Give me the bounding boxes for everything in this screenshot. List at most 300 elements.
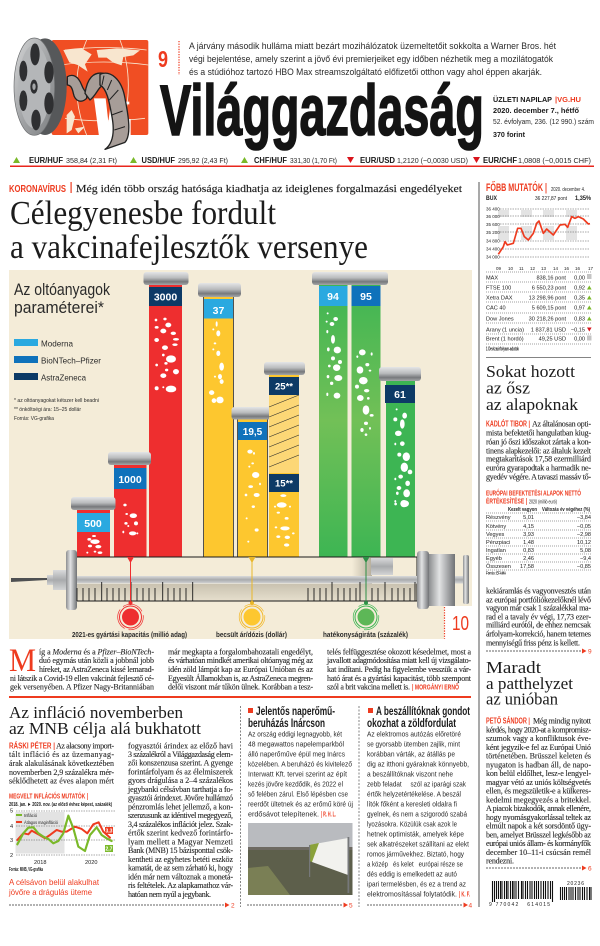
- vial: AstraZeneca price 15-25: [264, 362, 305, 557]
- BUX line chart: 16: [575, 266, 581, 271]
- table title: [486, 488, 581, 506]
- exchange rate ticker: EUR/HUF: [29, 156, 63, 165]
- indicators table: Dow Jones: [486, 316, 514, 322]
- story: green transition suppliers: [367, 706, 472, 910]
- continuation arrow: page 9: 9: [588, 648, 592, 656]
- photo: billboard on field: [248, 823, 352, 895]
- solar headline: beruházás Inárcson: [248, 718, 325, 730]
- chart subtitle: 2018. jan. ► 2020. nov. (az előző évhez képest, százalék): [9, 802, 112, 808]
- vial: Moderna price 37: 37: [213, 305, 224, 317]
- dotted teaser divider: [178, 41, 180, 75]
- axis labels: 2021-es gyártási kapacitás (millió adag): [72, 632, 187, 639]
- solar text: | R. H. L.: [321, 812, 336, 818]
- vial: Moderna price 37: [198, 283, 241, 557]
- story: EU stalemate text: nyugaton is hadban áll, de napo-: [486, 760, 591, 769]
- vial: AstraZeneca price 15-25: 15**: [275, 478, 293, 490]
- vial: Moderna efficacy 94: 94: [327, 291, 339, 303]
- table: European funds net sales: −9,4: [580, 556, 591, 562]
- barcode: issue add-on: 20236: [567, 881, 584, 887]
- table: European funds net sales: 0,83: [523, 548, 534, 554]
- story: funds headline: az alapoknak: [486, 395, 579, 414]
- exchange rate ticker: 295,92 (2,43 Ft): [178, 156, 228, 165]
- indicators table: 13 298,96 pont: [529, 296, 566, 302]
- lead article text: szól a brit vakcina mellett is.: [327, 682, 410, 692]
- pointer: efficacy marker (green): [353, 557, 379, 630]
- BUX line chart: 09: [496, 266, 502, 271]
- vial: Moderna capacity 3000: 3000: [154, 292, 177, 304]
- story: EU stalemate text: december 10–11-i csúcsán remél: [486, 848, 592, 857]
- chart source: Forrás: MNB, VG-grafika: [9, 867, 43, 873]
- indicators table: 0,35: [574, 296, 585, 302]
- suppliers text: [367, 730, 470, 898]
- vial: AstraZeneca price 15-25: 25**: [275, 382, 293, 392]
- story: inflation text column 2: pénzromlás lehet jellemző, a kon-: [128, 802, 233, 812]
- legend: BioNTech–Pfizer: [41, 356, 101, 366]
- story: funds intro text: megtakarítások 17,58 ezermilliárd: [486, 454, 591, 464]
- chart subhead: A célsávon belül alakulhat: [9, 877, 100, 887]
- story: inflation text column 1: RÁSKI PÉTER |: [9, 742, 55, 750]
- story: funds intro text: tinens alapkezelői: az általuk kezelt: [486, 446, 592, 456]
- BUX line chart: 16: [564, 266, 570, 271]
- story: inflation text column 2: [127, 742, 234, 899]
- story: EU stalemate headline: Maradt: [486, 658, 541, 677]
- table source: Forrás: EFAMA: [486, 570, 506, 576]
- vial: BioNTech-Pfizer efficacy 95: [345, 272, 388, 557]
- lead article text: duó egymás után közli a jobbnál jobb: [39, 656, 154, 665]
- indicators table: 1 837,81 USD: [531, 328, 566, 334]
- teaser text: A járvány második hulláma miatt bezárt mozihálózatok üzemeltetőit sokkolta a Warner Bros. hét: [189, 41, 556, 52]
- lead article text: ható árat és a gyártási kapacitást, több szempont: [327, 674, 472, 683]
- story: inflation text column 1: séklődhetett az éves alapon mért: [9, 776, 115, 786]
- issue information: |VG.HU: [555, 95, 581, 104]
- indicators heading: FŐBB MUTATÓK |: [486, 181, 547, 194]
- BUX line chart: 17: [588, 266, 594, 271]
- suppliers text: hetnek optimisták, amelyek képe: [367, 830, 464, 838]
- solar headline: Jelentős naperőmű-: [256, 706, 335, 718]
- issue information: 370 forint: [493, 130, 525, 139]
- story: funds headline: az ősz: [486, 378, 530, 398]
- exchange rate ticker: 358,84 (2,31 Ft): [66, 156, 117, 165]
- table: European funds net sales: 5,01: [523, 515, 534, 521]
- story: EU stalemate text: magyar vétó az uniós költségvetés: [486, 778, 591, 787]
- suppliers text: ipari termelésben, és ez a trend az: [367, 880, 466, 888]
- exchange rate ticker: USD/HUF: [142, 156, 175, 165]
- BUX line chart: 34 400: [486, 246, 500, 252]
- indicators table: 6 550,23 pont: [532, 286, 566, 292]
- table: European funds net sales: 10,12: [577, 540, 591, 546]
- lead story kicker: Még idén több ország hatósága kiadhatja az ideiglenes forgalmazási engedélyeket: [76, 183, 462, 195]
- story: EU stalemate text: [486, 716, 592, 866]
- BUX summary: 1,35%: [575, 195, 591, 202]
- story: EU stalemate text: kon belül eldőlhet, lesz-e lengyel-: [486, 769, 591, 778]
- table: European funds net sales: Ingatlan: [486, 548, 506, 554]
- story: EU stalemate text: rendezni.: [486, 857, 514, 866]
- story: inflation text column 2: idén már nem változnak a monetá-: [128, 872, 233, 882]
- lead story headline: Célegyenesbe fordult: [10, 195, 276, 232]
- solar text: Az ország eddigi legnagyobb, két: [248, 730, 342, 738]
- page reference 10: 10: [452, 613, 469, 635]
- story: inflation headline: [9, 703, 201, 738]
- indicators table: −0,15: [571, 328, 585, 334]
- story: funds continued text: az európai portfóliókezelőknél lévő: [486, 596, 591, 604]
- suppliers text: se gyorsabb ütemben zajlik, mint: [367, 740, 460, 748]
- indicators table: CAC 40: [486, 306, 506, 312]
- story: funds intro text: Az általánosan opti-: [532, 420, 591, 428]
- lead article text: [9, 643, 472, 692]
- lead article text: és várhatóan mindkét amerikai oltóanyag még az: [168, 656, 313, 665]
- story: EU stalemate text: történetében. Brüsszel keleten és: [486, 752, 591, 761]
- story: EU stalemate headline: [486, 658, 573, 708]
- indicators table: 0,00: [574, 276, 585, 282]
- drop cap: M: [9, 643, 36, 679]
- vial: BioNTech-Pfizer capacity 1000: [108, 452, 151, 557]
- story: EU stalemate text: kedelmi megegyezés a britekkel.: [486, 795, 591, 804]
- column divider dashed: [358, 706, 360, 907]
- story: inflation text column 1: novemberben 2,9 százalékra mér-: [9, 768, 114, 777]
- page reference 10: [444, 607, 469, 639]
- story: EU stalemate text: A piacok bizakodók, annak ellenére,: [486, 804, 591, 813]
- chart: inflation indicators: 2018: [34, 860, 46, 866]
- axis labels: hatékonyságiráta (százalék): [323, 632, 408, 639]
- exchange rate ticker: 1,2120 (−0,0030 USD): [397, 156, 468, 165]
- legend: [14, 338, 101, 382]
- table: European funds net sales: 17,58: [520, 564, 534, 570]
- suppliers text: sek alkatrészeket szállítani az elekt: [367, 840, 469, 848]
- BUX line chart: 34 000: [486, 254, 500, 260]
- table title: ÉRTÉKESÍTÉSE |: [486, 496, 527, 506]
- chart: inflation indicators: 5: [10, 808, 13, 814]
- barcode: main: [489, 881, 552, 908]
- BUX summary: [486, 195, 591, 202]
- story: funds continued text: kekiáramlás és vagyonvesztés után: [486, 586, 591, 596]
- indicators table: 0,97: [574, 306, 585, 312]
- axis labels: [72, 632, 408, 639]
- story: inflation text column 2: gyors drágulása a 2–4 százalékos: [128, 776, 233, 785]
- lead story headline: a vakcinafejlesztők versenye: [10, 229, 368, 266]
- story: inflation text column 2: forintárfolyam és az élelmiszerek: [128, 768, 233, 776]
- indicators table: 30 218,26 pont: [529, 316, 566, 322]
- vial: BioNTech-Pfizer price 19.5: 19,5: [243, 427, 263, 438]
- indicators table: Brent (1 hordó): [486, 336, 524, 342]
- indicators table: FTSE 100: [486, 286, 511, 292]
- vial: BioNTech-Pfizer capacity 1000: 1000: [118, 474, 142, 486]
- story: inflation text column 2: jegybanki célsávban tarthatja a fo-: [127, 785, 233, 794]
- chart legend: Átlagos maginfláció: [24, 819, 58, 825]
- chart subhead: jövőre a drágulás üteme: [8, 887, 92, 897]
- lead article text: delői viszont már tűkön ülnek. Korábban a tesz-: [168, 682, 313, 692]
- indicators table: 49,25 USD: [539, 336, 566, 342]
- story: EU stalemate text: európai uniós állam- és kormányfők: [486, 839, 591, 848]
- story: inflation text column 1: tált infláció és az üzemanyag-: [9, 750, 114, 759]
- lead article text: kat indítani. Pedig ha figyelembe vesszük a vár-: [327, 665, 471, 674]
- solar headline: [248, 706, 335, 730]
- story: EU stalemate text: kérdés, hogy 2020-at a kompromisz-: [486, 725, 591, 734]
- table: European funds net sales: Összesen: [486, 563, 511, 570]
- table: European funds net sales: Vegyes: [486, 532, 505, 538]
- story: funds continued text: milliárd eurótól, de ehhez nemcsak: [486, 620, 591, 630]
- vial: BioNTech-Pfizer price 19.5: [232, 407, 274, 557]
- story: EU stalemate text: ellen, és megszületik-e a külkeres-: [486, 787, 591, 796]
- BUX line chart: 36 400: [486, 206, 500, 212]
- teaser text: és a stúdióhoz tartozó HBO Max streamszolgáltató előfizetői otthon vagy ahol éppen akarják.: [189, 67, 542, 78]
- BUX summary: 36 227,87 pont: [535, 196, 567, 202]
- solar text: kezés jövőre kezdődik, és 2022 el: [248, 780, 343, 788]
- table: European funds net sales: 1,48: [523, 540, 534, 546]
- vial: AstraZeneca efficacy 61: [379, 367, 421, 557]
- pointer: price marker (yellow): [239, 557, 265, 630]
- lead article text: ni látszik a Covid-19 ellen vakcinát fejlesztő cé-: [10, 674, 154, 683]
- lead story headline: [10, 195, 368, 266]
- table: European funds net sales: [486, 488, 591, 576]
- table: European funds net sales: Kötvény: [486, 524, 506, 530]
- solar text: reerdőt ültetnek és az erőmű köré új: [248, 800, 353, 808]
- indicators table: 5 609,15 pont: [532, 306, 566, 312]
- value tag: inflation: 2,7: [106, 846, 113, 852]
- BUX line chart: 12: [530, 266, 536, 271]
- table: European funds net sales: Kezelt vagyon: [508, 507, 537, 513]
- story: inflation text column 2: Bank (MNB) 15 bázisponttal csök-: [128, 846, 233, 855]
- vial: Moderna capacity 500: [71, 497, 116, 557]
- continuation arrow: page 5: 5: [349, 902, 353, 910]
- continuation arrow: page 4: 4: [468, 902, 472, 910]
- BUX line chart: 35 200: [486, 230, 500, 235]
- infographic panel: vaccine parameters: [9, 270, 472, 639]
- indicators table: Xetra DAX: [486, 296, 513, 302]
- exchange rate ticker: CHF/HUF: [254, 156, 287, 165]
- table: European funds net sales: −0,05: [577, 524, 591, 530]
- suppliers headline: A beszállítóknak gondot: [376, 706, 470, 718]
- vial: Moderna efficacy 94: [312, 272, 354, 557]
- BUX line chart: 13: [541, 266, 547, 271]
- story: EU stalemate text: szumok vagy a konfliktusok éve-: [486, 734, 591, 743]
- story: inflation text column 1: árak alakulásának következtében: [9, 759, 114, 768]
- story: funds continued text: vagyon már csak 1 százalékkal ma-: [486, 604, 591, 612]
- BUX summary: BUX: [486, 196, 497, 202]
- indicators table: Arany (1 uncia): [486, 328, 524, 334]
- table: European funds net sales: Részvény: [486, 515, 511, 521]
- graphic title: [14, 281, 111, 317]
- suppliers text: romos járművekhez. Biztató, hogy: [367, 850, 464, 858]
- masthead logo: film reel on orange world map: [14, 38, 148, 149]
- story: inflation text column 1: Az alacsony import-: [56, 742, 114, 750]
- continuation arrow: page 2: [9, 902, 235, 910]
- legend: AstraZeneca: [41, 372, 86, 382]
- continuation arrow: page 5: [247, 902, 353, 910]
- BUX line chart: 35 600: [486, 222, 500, 227]
- exchange rate ticker: 1,0808 (−0,0015 CHF): [518, 156, 591, 165]
- indicators table: 0,83: [574, 316, 585, 322]
- lead article text: javallott adagmódosítása miatt kell új vizsgálato-: [326, 656, 471, 665]
- suppliers text: dés eddig is emelkedett az autó: [367, 870, 457, 878]
- story: inflation text column 2: ris feltételek. Az alapkamathoz vár-: [128, 881, 233, 890]
- story: inflation text column 2: kamatát, de az sem zárható ki, hogy: [128, 864, 233, 873]
- table: European funds net sales: Egyéb: [486, 556, 502, 562]
- vial: Moderna capacity 500: 500: [84, 518, 102, 530]
- graphic notes: ** önköltségi ára: 15–25 dollár: [14, 407, 81, 413]
- BUX line chart: 10: [508, 266, 514, 271]
- syringe: [11, 550, 469, 610]
- continuation arrow: page 2: 2: [231, 902, 235, 910]
- story: inflation text column 2: zői konszenzusa szerint. A gyenge: [128, 759, 233, 768]
- solar text: Interwatt Kft. tervei szerint az épít: [248, 770, 347, 778]
- story: EU stalemate text: elmúlt napok a két sorsdöntő ügy-: [486, 822, 591, 831]
- story: inflation headline: az MNB célja alá bukhatott: [9, 719, 201, 738]
- table: European funds net sales: Pénzpiaci: [486, 540, 510, 546]
- axis labels: becsült ár/dózis (dollár): [216, 632, 287, 639]
- BUX line chart: 14: [553, 266, 559, 271]
- suppliers text: zebb feladat szól az iparági szak: [367, 780, 466, 788]
- suppliers text: korábban várták, az átállás pe: [367, 750, 455, 758]
- story: funds continued text: rad el a tavaly év végi, 17,73 ezer-: [486, 612, 591, 622]
- story: funds intro text: KADLÓT TIBOR |: [486, 420, 530, 428]
- exchange rate ticker: EUR/CHF: [483, 156, 517, 165]
- table: European funds net sales: −3,84: [577, 515, 591, 521]
- story: funds continued text: mennyiségű friss pénz is kellett.: [486, 638, 580, 648]
- pointer: capacity marker (red): [118, 557, 143, 630]
- value tag: core inflation: 3,3: [106, 828, 113, 834]
- suppliers text: | K. F.: [459, 892, 470, 898]
- table: European funds net sales: −0,85: [577, 564, 591, 570]
- indicators table: 0,92: [574, 286, 585, 292]
- suppliers text: gyelnek, és nem a szigorodó szabá: [367, 810, 468, 818]
- story: inflation text column 2: 3 százalékról a Világgazdaság elem-: [128, 750, 233, 759]
- issue information: 2020. december 7., hétfő: [493, 106, 579, 115]
- story: EU stalemate text: ben, amelyet Brüsszel legkésőbb az: [486, 830, 591, 839]
- graphic notes: Forrás: VG-grafika: [14, 416, 55, 422]
- suppliers text: a beszállítóknak viszont nehe: [367, 770, 453, 778]
- suppliers text: elektromosítással folytatódik.: [367, 890, 457, 898]
- BUX line chart: 11: [519, 266, 524, 271]
- lead article text: Egyesült Államokban is, az AstraZeneca megren-: [168, 673, 313, 683]
- issue information: [493, 95, 594, 139]
- BUX line chart: 36 000: [486, 214, 500, 219]
- suppliers text: értők helyzetértékelése. A beszál: [367, 790, 461, 798]
- lead article text: | MORGÁNYI ERNŐ: [412, 682, 459, 692]
- indicators table: MAX: [486, 276, 498, 282]
- indicators footnote: 1 Devizaárfolyam-adatok: [486, 346, 519, 352]
- table: European funds net sales: 2,46: [523, 556, 534, 562]
- graphic notes: [14, 398, 99, 422]
- story: EU stalemate text: hogy nyomásgyakorlással teltek az: [486, 813, 591, 822]
- continuation arrow: page 6: [486, 866, 592, 872]
- suppliers text: a közép és kelet európai része se: [367, 860, 463, 868]
- story: funds headline: [486, 362, 579, 414]
- story: funds intro text: mista befektetői hangulatban kiug-: [486, 428, 591, 438]
- section rule: [9, 696, 471, 698]
- column divider dashed: [240, 706, 242, 907]
- story: funds continued text: árfolyam-korrekció, hanem tetemes: [486, 630, 591, 638]
- lead article text: telés felfüggesztése okozott késedelmet, most a: [327, 648, 471, 656]
- solar text: álló naperőműve épül meg Inárcs: [248, 750, 345, 758]
- indicators heading: 2020. december 4.: [551, 187, 585, 193]
- continuation arrow: page 4: [367, 902, 472, 910]
- sidebar rule: [486, 356, 591, 359]
- lead article text: gek versenyében. A Pfizer Nagy-Britanniában: [10, 682, 154, 692]
- table: European funds net sales: 4,15: [523, 524, 534, 530]
- story: inflation text column 2: kentheti az egyhetes betéti eszköz: [128, 855, 233, 864]
- chart subhead: [8, 877, 100, 897]
- page number 9: 9: [158, 46, 168, 72]
- story: inflation text column 2: fogyasztói árindex az előző havi: [128, 742, 234, 750]
- story: inflation text column 2: szenzusunk az idéntivel megegyező,: [128, 811, 233, 820]
- story: funds continued text: [486, 586, 591, 648]
- story: funds headline: Sokat hozott: [486, 362, 575, 381]
- logo letters: [94, 98, 131, 136]
- table title: 2020 (millió euró): [529, 500, 557, 506]
- exchange rate ticker: 331,30 (1,70 Ft): [290, 156, 337, 165]
- table: European funds net sales: 5,08: [580, 548, 591, 554]
- graphic title: paraméterei*: [14, 299, 105, 317]
- indicators table: 838,16 pont: [536, 276, 566, 282]
- lead article text: idén zöld lámpát kap az Európai Unióban és az: [168, 665, 313, 674]
- barcode: main: 9 770042 614015: [489, 902, 550, 908]
- table: European funds net sales: 3,93: [523, 532, 534, 538]
- suppliers text: lítók főként a keresleti oldalra fi: [367, 800, 457, 808]
- suppliers text: Az elektromos autózás előretöré: [367, 730, 461, 738]
- graphic title: Az oltóanyagok: [14, 281, 111, 299]
- story: EU stalemate headline: az unióban: [486, 690, 558, 708]
- BUX line chart: [486, 206, 594, 271]
- vial: Moderna capacity 3000: [144, 272, 188, 557]
- lead article text: íg a Moderna és a Pfizer–BioNTech-: [39, 648, 154, 656]
- graphic notes: * az oltóanyagokat kétszer kell beadni: [14, 398, 99, 404]
- lead article text: már megkapta a forgalombahozatali engedélyt,: [168, 648, 313, 656]
- story: inflation text column 2: gyasztói árindexet. Jövőre hullámzó: [128, 794, 233, 803]
- teaser text: végi bejelentése, amely szerint a jövő évi premierjeiket egy időben nézhetik meg a mozilátogatók: [189, 54, 553, 65]
- chart: inflation indicators: 3: [10, 838, 13, 844]
- story: funds intro text: euróra gyarapodtak a harmadik ne-: [486, 464, 591, 472]
- continuation arrow: page 9: [486, 648, 592, 656]
- chart title: MEGVELT INFLÁCIÓS MUTATÓK |: [9, 792, 88, 800]
- solar text: 48 megawattos napelemparkból: [248, 740, 344, 748]
- vial: BioNTech-Pfizer efficacy 95: 95: [360, 291, 372, 303]
- story: inflation text column 2: értők szerint kedvező forintárfo-: [128, 829, 233, 838]
- story: inflation text column 2: hatóan nem nyúl a jegybank.: [128, 890, 211, 899]
- BUX line chart: 34 800: [486, 238, 500, 244]
- chart: inflation indicators: [9, 792, 115, 873]
- story: EU stalemate text: Még mindig nyitott: [533, 716, 592, 726]
- suppliers headline: okozhat a zöldfordulat: [367, 718, 456, 730]
- story: inflation headline: Az infláció novemberben: [9, 703, 184, 722]
- story: funds intro text: gyedév végére. A tavaszi massáv tő-: [486, 472, 591, 482]
- vial: AstraZeneca efficacy 61: 61: [394, 389, 406, 401]
- suppliers text: lyozásokra. Közülük csak azok le: [367, 820, 457, 828]
- exchange rate ticker: [13, 156, 591, 165]
- chart: inflation indicators: 2: [10, 853, 13, 859]
- story: EU stalemate text: PETŐ SÁNDOR |: [486, 716, 530, 726]
- chart legend: [16, 813, 58, 825]
- barcode: issue add-on: [560, 881, 591, 900]
- masthead rule: [10, 166, 594, 167]
- continuation arrow: page 6: 6: [588, 866, 592, 872]
- exchange rate ticker: EUR/USD: [360, 156, 395, 165]
- solar text: [248, 730, 353, 818]
- panel: key indicators: [486, 181, 594, 352]
- story: funds intro text: róan jó őszi időszakot zártak a kon-: [486, 438, 591, 446]
- suppliers text: dig az itthoni gyáraknak könnyebb,: [367, 760, 469, 768]
- legend: Moderna: [41, 338, 73, 348]
- teaser text: [189, 41, 556, 78]
- table: European funds net sales: −2,98: [577, 532, 591, 538]
- story: EU stalemate text: ként jegyzik-e fel az Európai Unió: [486, 743, 591, 752]
- story: inflation text column 2: lyam mellett a Magyar Nemzeti: [128, 838, 234, 846]
- indicators table: [486, 272, 592, 344]
- lead article text: híreket, az AstraZeneca kissé lemarad-: [39, 665, 154, 674]
- solar text: közelében. A beruházó és kivitelező: [248, 760, 352, 768]
- story: inflation text column 2: 3,4 százalékos inflációt jelez. Szak-: [128, 820, 233, 829]
- chart: inflation indicators: 4: [10, 824, 13, 830]
- suppliers headline: [367, 706, 470, 730]
